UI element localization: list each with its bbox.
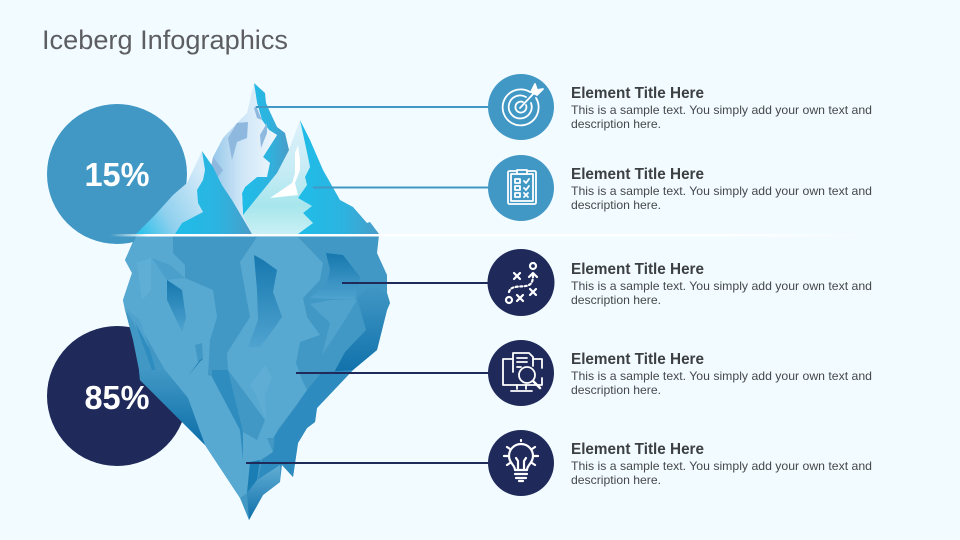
icon: checklist — [508, 170, 536, 204]
iceberg — [123, 83, 390, 520]
item 1: description here. — [571, 117, 661, 131]
icon: target — [503, 84, 543, 125]
iceberg: above water — [136, 83, 379, 234]
badge: 15%: 15% — [84, 156, 150, 193]
iceberg: below water — [123, 235, 390, 520]
item 5 — [488, 430, 872, 496]
item 4 — [488, 340, 872, 406]
badge: 15% — [47, 104, 187, 244]
item 5: description here. — [571, 473, 661, 487]
badge: 85% — [47, 326, 187, 466]
item 5: This is a sample text. You simply add your own text and — [571, 459, 872, 473]
item 1: Element Title Here — [571, 85, 704, 102]
item 4: This is a sample text. You simply add your own text and — [571, 369, 872, 383]
item 2: This is a sample text. You simply add your own text and — [571, 184, 872, 198]
icon: monitor and magnifier — [503, 353, 542, 391]
connector lines — [246, 106, 490, 464]
item 4: description here. — [571, 383, 661, 397]
item 4: Element Title Here — [571, 351, 704, 368]
item 2: Element Title Here — [571, 166, 704, 183]
item 3: Element Title Here — [571, 261, 704, 278]
item 2: description here. — [571, 198, 661, 212]
item 3 — [488, 249, 872, 316]
waterline — [110, 234, 875, 236]
item 2 — [488, 155, 872, 221]
icon: light bulb — [504, 440, 538, 481]
item 1: This is a sample text. You simply add your own text and — [571, 103, 872, 117]
icon: strategy — [506, 263, 537, 303]
badge: 85%: 85% — [84, 379, 150, 416]
item 5: Element Title Here — [571, 441, 704, 458]
item 1 — [488, 74, 872, 140]
item 3: description here. — [571, 293, 661, 307]
item 3: This is a sample text. You simply add your own text and — [571, 279, 872, 293]
title: Iceberg Infographics — [42, 25, 288, 55]
